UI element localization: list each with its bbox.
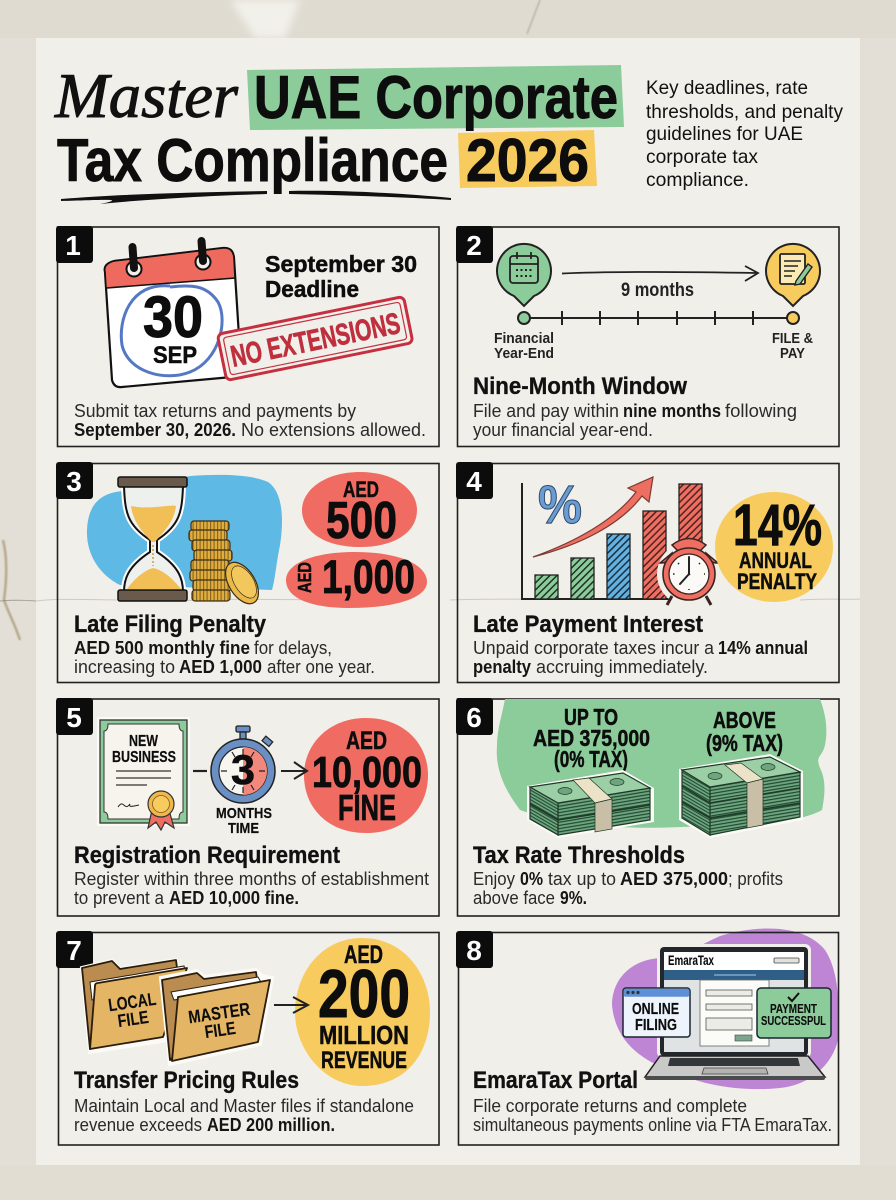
icon: business certificate: BUSINESS: [112, 749, 176, 766]
callout: AED 200 million revenue: 200: [318, 956, 410, 1032]
description: Enjoy: [473, 869, 515, 889]
description: simultaneous payments online via FTA EmaraTax.: [473, 1115, 832, 1135]
icon: stopwatch: 3: [231, 746, 255, 793]
icon: laptop: [645, 944, 825, 1080]
icon: alarm clock: [657, 538, 721, 606]
description: ; profits: [728, 869, 783, 889]
callout: 14% annual penalty: PENALTY: [737, 569, 817, 594]
panel 2: nine-month window: [456, 226, 839, 446]
icon: local file folder: [82, 960, 190, 1052]
panel 4: late payment interest: [456, 462, 839, 682]
description: [74, 401, 426, 440]
online filing window: ONLINE: [632, 1001, 679, 1018]
title highlight: green: [247, 65, 624, 130]
arrow: nine months: [562, 266, 758, 281]
description: revenue exceeds: [74, 1115, 202, 1135]
label: financial year-end: Year-End: [494, 345, 554, 362]
description: AED 10,000 fine.: [169, 888, 299, 908]
dash connector: [193, 770, 207, 772]
number badge 2: 2: [466, 230, 482, 261]
description: Register within three months of establishment: [74, 869, 429, 889]
description: File corporate returns and complete: [473, 1096, 747, 1116]
payment successful card: SUCCESSPUL: [761, 1014, 826, 1028]
icon: calendar: SEP: [153, 342, 197, 369]
icon: stopwatch: [211, 726, 275, 803]
heading: September 30: [265, 251, 417, 277]
icon: calendar: 30: [143, 285, 203, 350]
description: increasing to: [74, 657, 175, 677]
panel 6: tax rate thresholds: [456, 698, 839, 916]
payment successful card: PAYMENT: [770, 1001, 817, 1016]
callout: 14% annual penalty: ANNUAL: [739, 548, 812, 573]
callout: AED 200 million revenue: AED: [344, 941, 383, 969]
number badge 6: [456, 698, 493, 735]
heading: Registration Requirement: [74, 842, 340, 869]
heading: [265, 251, 417, 302]
description: [473, 869, 783, 908]
description: AED 500 monthly fine: [74, 638, 250, 658]
description: September 30, 2026.: [74, 420, 236, 440]
icon: large cash stack: [679, 754, 803, 838]
callout: AED 500: 500: [326, 492, 397, 550]
label: financial year-end: Financial: [494, 330, 554, 347]
description: 14% annual: [718, 638, 808, 658]
callout: AED 1,000: AED: [295, 562, 315, 593]
arrow: [274, 997, 308, 1013]
label: file and pay: FILE &: [772, 330, 813, 347]
description: Submit tax returns and payments by: [74, 401, 356, 421]
heading: Late Payment Interest: [473, 611, 703, 638]
label: above 9% tax: ABOVE: [713, 707, 776, 733]
subtitle: thresholds, and penalty: [646, 101, 843, 123]
icon: coin stack: [189, 521, 265, 609]
description: nine months: [623, 401, 721, 421]
description: to prevent a: [74, 888, 165, 908]
label: above 9% tax: [706, 707, 783, 756]
description: Maintain Local and Master files if standalone: [74, 1096, 414, 1116]
subtitle: corporate tax: [646, 146, 758, 168]
title underline: [61, 191, 451, 204]
blue blob: [87, 475, 282, 590]
title: UAE Corporate: UAE Corporate: [254, 64, 618, 131]
heading: EmaraTax Portal: [473, 1067, 638, 1094]
callout: AED 200 million revenue: [295, 938, 430, 1086]
description: for delays,: [254, 638, 332, 658]
description: No extensions allowed.: [241, 420, 426, 440]
icon: master file folder: MASTER: [187, 999, 251, 1027]
label: up to AED 375,000: AED 375,000: [533, 725, 650, 751]
number badge 7: 7: [66, 935, 82, 966]
icon: business certificate: NEW: [129, 733, 158, 750]
heading: Deadline: [265, 276, 359, 302]
label: months time: MONTHS: [216, 805, 272, 822]
title: Tax Compliance: Tax Compliance: [57, 127, 448, 194]
percent sign: %: [538, 475, 582, 535]
number badge 3: [56, 462, 93, 499]
description: [74, 869, 429, 908]
description: [74, 638, 375, 677]
description: tax up to: [548, 869, 616, 889]
description: Unpaid corporate taxes incur a: [473, 638, 715, 658]
panel 5: registration requirement: [56, 698, 439, 916]
number badge 8: [456, 931, 493, 968]
label: above 9% tax: (9% TAX): [706, 730, 783, 756]
callout: AED 200 million revenue: REVENUE: [321, 1047, 407, 1074]
icon: master file folder: [161, 970, 272, 1064]
description: AED 375,000: [620, 869, 728, 889]
description: after one year.: [267, 657, 375, 677]
heading: Late Filing Penalty: [74, 611, 266, 638]
stamp: no extensions: NO EXTENSIONS: [228, 307, 403, 374]
label: 9 months: 9 months: [621, 280, 694, 301]
number badge 2: [456, 226, 493, 263]
label: months time: TIME: [228, 820, 259, 837]
label: file and pay: [772, 330, 813, 362]
number badge 5: [56, 698, 93, 735]
callout: AED 10,000 fine: [304, 718, 428, 833]
label: file and pay: PAY: [780, 345, 805, 362]
callout: AED 10,000 fine: FINE: [338, 787, 396, 828]
callout: AED 10,000 fine: 10,000: [312, 748, 422, 797]
description: your financial year-end.: [473, 420, 653, 440]
number badge 5: 5: [66, 702, 82, 733]
arrow: [281, 762, 307, 779]
description: following: [725, 401, 797, 421]
icon: hourglass: [118, 477, 187, 601]
heading: Transfer Pricing Rules: [74, 1067, 299, 1094]
callout: 14% annual penalty: [715, 492, 833, 602]
icon: small cash stack: [527, 770, 654, 838]
description: accruing immediately.: [536, 657, 708, 677]
online filing window: FILING: [635, 1017, 677, 1034]
icon: master file folder: FILE: [203, 1018, 237, 1042]
description: AED 1,000: [179, 657, 262, 677]
description: 0%: [520, 869, 543, 889]
heading: Nine-Month Window: [473, 373, 688, 400]
icon: local file folder: FILE: [116, 1007, 150, 1031]
subtitle: guidelines for UAE: [646, 123, 803, 145]
hand-drawn circle: [121, 286, 222, 376]
heading: Tax Rate Thresholds: [473, 842, 685, 869]
online filing window: [623, 988, 690, 1037]
label: up to AED 375,000: (0% TAX): [554, 746, 628, 772]
stamp: no extensions: [217, 297, 413, 380]
subtitle: [646, 77, 843, 191]
icon: business certificate: [97, 717, 190, 830]
number badge 4: 4: [466, 466, 482, 497]
label: up to AED 375,000: [533, 704, 650, 772]
subtitle: Key deadlines, rate: [646, 77, 808, 99]
bar chart: [522, 483, 702, 599]
number badge 1: 1: [65, 230, 81, 261]
label: EmaraTax brand: EmaraTax: [668, 953, 714, 968]
title: script word: Master: [54, 60, 239, 131]
icon: green calendar pin: [497, 244, 551, 306]
title highlight: yellow: [458, 130, 597, 188]
subtitle: compliance.: [646, 169, 749, 191]
description: above face: [473, 888, 555, 908]
icon: calendar: [105, 241, 241, 387]
label: up to AED 375,000: UP TO: [564, 704, 618, 730]
icon: yellow document pin: [766, 244, 820, 306]
number badge 1: [56, 226, 93, 263]
description: penalty: [473, 657, 531, 677]
callout: AED 500: AED: [343, 477, 379, 502]
purple blob: [612, 929, 839, 1089]
callout: AED 1,000: [286, 550, 427, 608]
label: financial year-end: [494, 330, 554, 362]
description: [473, 401, 797, 440]
callout: AED 500: [302, 472, 417, 550]
callout: 14% annual penalty: 14%: [733, 493, 822, 558]
green blob: [497, 699, 826, 828]
number badge 4: [456, 462, 493, 499]
label: months time: [216, 805, 272, 837]
panel 8: EmaraTax portal: [456, 929, 839, 1145]
description: 9%.: [560, 888, 587, 908]
title: 2026: 2026: [466, 127, 589, 194]
panel 3: late filing penalty: [56, 462, 439, 682]
icon: local file folder: LOCAL: [107, 989, 157, 1015]
timeline: [518, 311, 799, 325]
description: AED 200 million.: [207, 1115, 335, 1135]
callout: AED 200 million revenue: MILLION: [319, 1020, 409, 1050]
title block: [54, 60, 624, 204]
trend arrow: [533, 477, 653, 557]
panel 1: September 30 deadline: [56, 226, 439, 446]
description: [473, 638, 808, 677]
description: [74, 1096, 414, 1135]
number badge 6: 6: [466, 702, 482, 733]
callout: AED 1,000: 1,000: [322, 550, 415, 603]
description: File and pay within: [473, 401, 619, 421]
panel 7: transfer pricing rules: [56, 931, 439, 1145]
payment successful card: [757, 988, 831, 1038]
callout: AED 10,000 fine: AED: [346, 727, 387, 755]
number badge 8: 8: [466, 935, 482, 966]
number badge 7: [56, 931, 93, 968]
number badge 3: 3: [66, 466, 82, 497]
description: [473, 1096, 832, 1135]
